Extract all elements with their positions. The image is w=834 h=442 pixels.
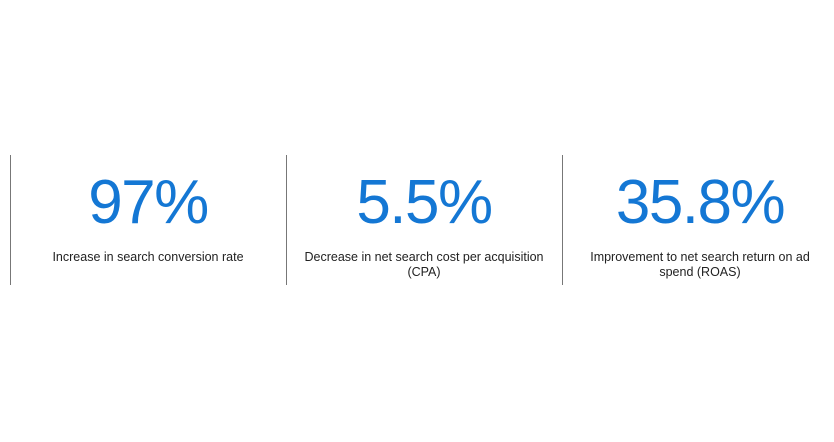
label: conversion: Increase in search conversion rate	[52, 250, 244, 264]
label: CPA: (CPA)	[407, 265, 441, 279]
label: CPA: Decrease in net search cost per acquisition	[304, 250, 544, 264]
label: CPA	[304, 250, 544, 279]
label: ROAS: spend (ROAS)	[659, 265, 741, 279]
panel: CPA	[304, 168, 544, 279]
label: ROAS	[590, 250, 810, 279]
number: 35.8%: 35.8%	[616, 168, 784, 237]
number: 97%: 97%	[88, 168, 208, 237]
panel: ROAS	[590, 168, 810, 279]
label: ROAS: Improvement to net search return on ad	[590, 250, 810, 264]
number: 5.5%: 5.5%	[356, 168, 492, 237]
panel: conversion rate	[52, 168, 244, 264]
